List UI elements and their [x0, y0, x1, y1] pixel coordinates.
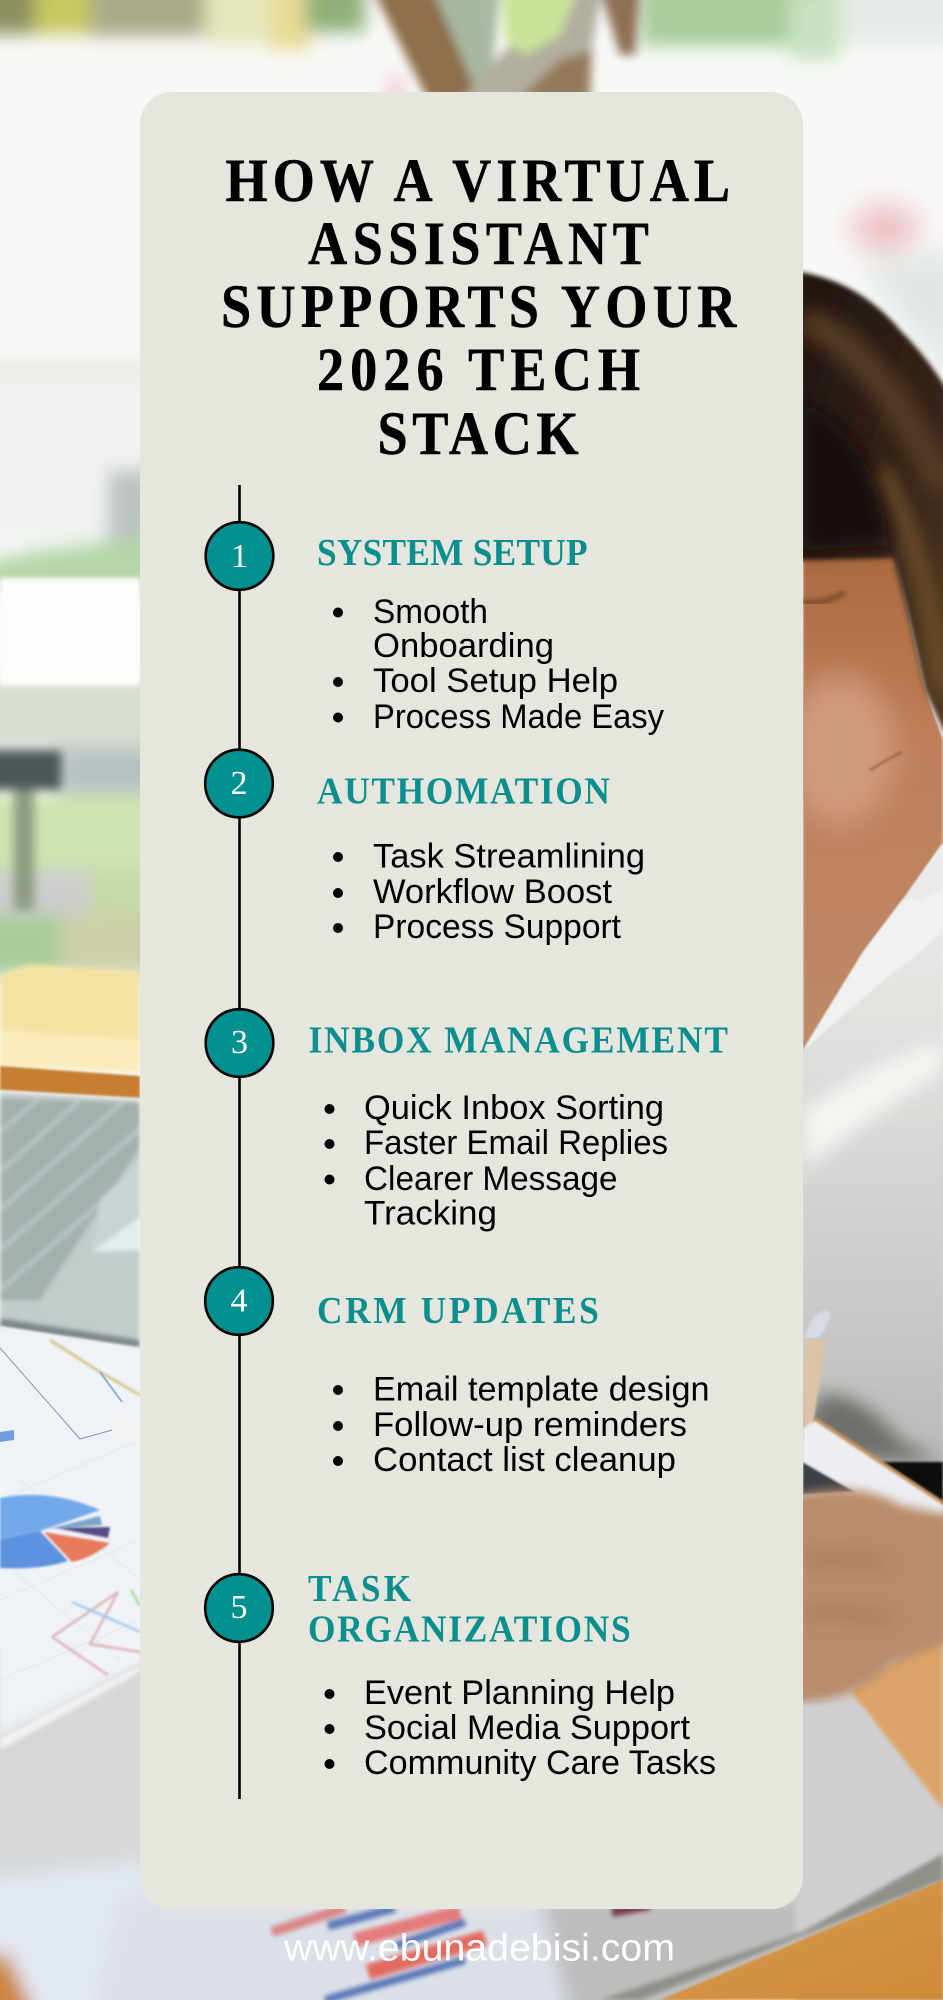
step 4: crm updates [205, 1267, 709, 1479]
step 3: inbox management [206, 1009, 728, 1232]
wooden table [850, 1630, 943, 1825]
bullet list: Tracking [364, 1194, 497, 1232]
bullet list: Faster Email Replies [364, 1124, 668, 1162]
paper edge highlight [0, 1664, 140, 1750]
heading: CRM UPDATES [317, 1289, 599, 1331]
number badge 2 [205, 750, 273, 817]
step 1: system setup [206, 522, 664, 736]
documents with pie chart [0, 1326, 140, 1737]
bullet list: Quick Inbox Sorting [364, 1089, 664, 1127]
title: HOW A VIRTUAL [226, 148, 730, 215]
notebook edge [600, 1854, 943, 2000]
bullet list: Community Care Tasks [364, 1744, 716, 1782]
heading [308, 1567, 631, 1650]
lower left paper [0, 1668, 150, 2000]
bullet list: Onboarding [373, 627, 554, 665]
bullet list: Tool Setup Help [373, 662, 618, 700]
number badge 5: 5 [230, 1589, 248, 1626]
number badge 4 [205, 1267, 273, 1335]
footer website url: www.ebunadebisi.com [283, 1928, 675, 1970]
bullet list: Event Planning Help [364, 1674, 675, 1712]
pie chart [0, 1495, 110, 1568]
dark garden object [0, 750, 62, 910]
title: SUPPORTS YOUR [221, 274, 738, 341]
bullet list: Task Streamlining [373, 838, 645, 876]
heading: AUTHOMATION [317, 769, 610, 812]
bullet list [333, 593, 664, 736]
pencil [803, 1311, 830, 1432]
bullet list: Follow-up reminders [373, 1406, 687, 1444]
woman's hair [800, 272, 943, 745]
title: ASSISTANT [308, 211, 649, 278]
title: STACK [378, 401, 579, 468]
laptop [0, 1092, 150, 1348]
heading: SYSTEM SETUP [317, 531, 588, 573]
bullet list: Social Media Support [364, 1709, 691, 1747]
timeline line [238, 485, 241, 1799]
number badge 2: 2 [230, 765, 248, 802]
hand [795, 1489, 943, 1703]
tablet [803, 1419, 943, 1520]
foliage and tree trunk [0, 0, 943, 128]
white shelf [0, 578, 140, 685]
white shirt [803, 843, 943, 1480]
grey notebook [795, 1706, 943, 1932]
title [221, 148, 738, 468]
yellow notebook [0, 965, 140, 1072]
bullet list: Email template design [373, 1370, 710, 1408]
bullet list [333, 1370, 710, 1479]
base tones for lower corners [0, 1040, 943, 2000]
heading: TASK [308, 1567, 412, 1609]
number badge 4: 4 [230, 1282, 248, 1320]
bullet list [333, 838, 645, 946]
bullet list: Contact list cleanup [373, 1441, 676, 1479]
number badge 3: 3 [231, 1024, 248, 1061]
bullet list [324, 1089, 668, 1232]
title: 2026 TECH [317, 337, 640, 404]
heading: INBOX MANAGEMENT [308, 1018, 728, 1061]
step 5: task organizations [205, 1567, 716, 1782]
blurred bars [272, 1905, 650, 2000]
line chart [52, 1590, 140, 1675]
bullet list [324, 1674, 716, 1782]
number badge 3 [206, 1009, 273, 1077]
number badge 5 [205, 1574, 273, 1642]
dark shirt hem [870, 1462, 943, 1505]
bullet list: Smooth [373, 593, 488, 631]
lower centre paper [90, 1860, 943, 2000]
wooden desk edge [0, 1066, 140, 1098]
bullet list: Process Made Easy [373, 698, 664, 736]
lower right wood [660, 1880, 943, 2000]
top right background [851, 204, 943, 390]
number badge 1 [206, 522, 273, 590]
number badge 1: 1 [231, 538, 248, 575]
bullet list: Process Support [373, 908, 622, 946]
step 2: authomation [205, 750, 645, 946]
bullet list: Clearer Message [364, 1160, 618, 1198]
panel: main card [140, 92, 803, 1909]
woman's face and neck [785, 540, 943, 1051]
heading: ORGANIZATIONS [308, 1607, 631, 1650]
left blurred garden [0, 362, 170, 975]
bullet list: Workflow Boost [373, 873, 613, 911]
